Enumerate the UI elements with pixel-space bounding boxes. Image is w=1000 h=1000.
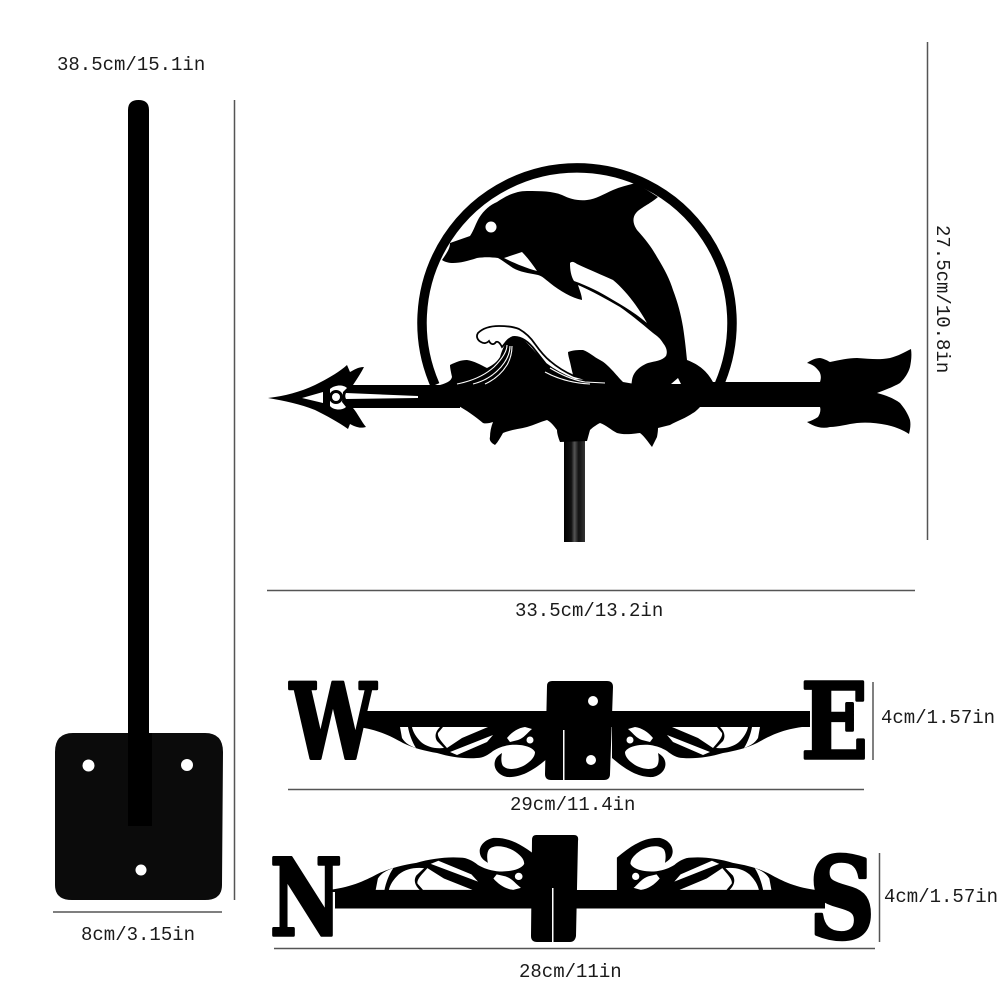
center hinge bbox=[531, 835, 578, 942]
letter E: E bbox=[801, 660, 868, 783]
letter N: N bbox=[270, 835, 342, 960]
pole bbox=[128, 100, 152, 826]
dimension label: pole length: 38.5cm/15.1in bbox=[57, 54, 205, 76]
letter W: W bbox=[289, 660, 378, 783]
arm bar bbox=[335, 890, 825, 908]
support post bbox=[564, 436, 585, 542]
hinge plate bbox=[545, 681, 613, 780]
water mass with waves bbox=[420, 337, 700, 447]
dolphin bbox=[442, 183, 714, 395]
dimension label: vane width: 33.5cm/13.2in bbox=[515, 600, 663, 622]
dimension label: arm width: 28cm/11in bbox=[519, 961, 622, 983]
mounting plate bbox=[55, 733, 223, 900]
dolphin eye bbox=[486, 222, 496, 232]
arrow shaft and head bbox=[268, 365, 460, 429]
scroll ornament right bbox=[617, 838, 815, 892]
ring bbox=[422, 168, 732, 385]
scroll ornament right bbox=[612, 725, 802, 777]
north south direction arm bbox=[270, 834, 875, 965]
letter S: S bbox=[809, 834, 875, 965]
fishtail shaft bbox=[700, 349, 911, 434]
arrow head cutouts bbox=[302, 386, 418, 410]
scroll ornament left bbox=[330, 838, 538, 892]
east west direction arm bbox=[289, 660, 868, 783]
dimension label: arm width: 29cm/11.4in bbox=[510, 794, 635, 816]
dimension label: arm height: 4cm/1.57in bbox=[881, 707, 995, 729]
tail gap bbox=[671, 378, 681, 384]
arrow eye bbox=[330, 392, 342, 402]
dolphin weathervane bbox=[268, 168, 911, 542]
dimension label: vane height: 27.5cm/10.8in bbox=[931, 225, 953, 373]
arm bar bbox=[360, 711, 810, 727]
wave highlight lines bbox=[457, 345, 605, 384]
scroll ornament left bbox=[358, 725, 548, 777]
pole and mounting plate bbox=[55, 100, 223, 900]
plate screw holes bbox=[82, 759, 193, 876]
hinge slit bbox=[552, 888, 554, 942]
dimension lines bbox=[53, 42, 928, 948]
hinge slit and holes bbox=[563, 696, 598, 780]
dimension label: plate width: 8cm/3.15in bbox=[81, 924, 195, 946]
dimension label: arm height: 4cm/1.57in bbox=[884, 886, 998, 908]
wave crest outline bbox=[477, 326, 592, 381]
